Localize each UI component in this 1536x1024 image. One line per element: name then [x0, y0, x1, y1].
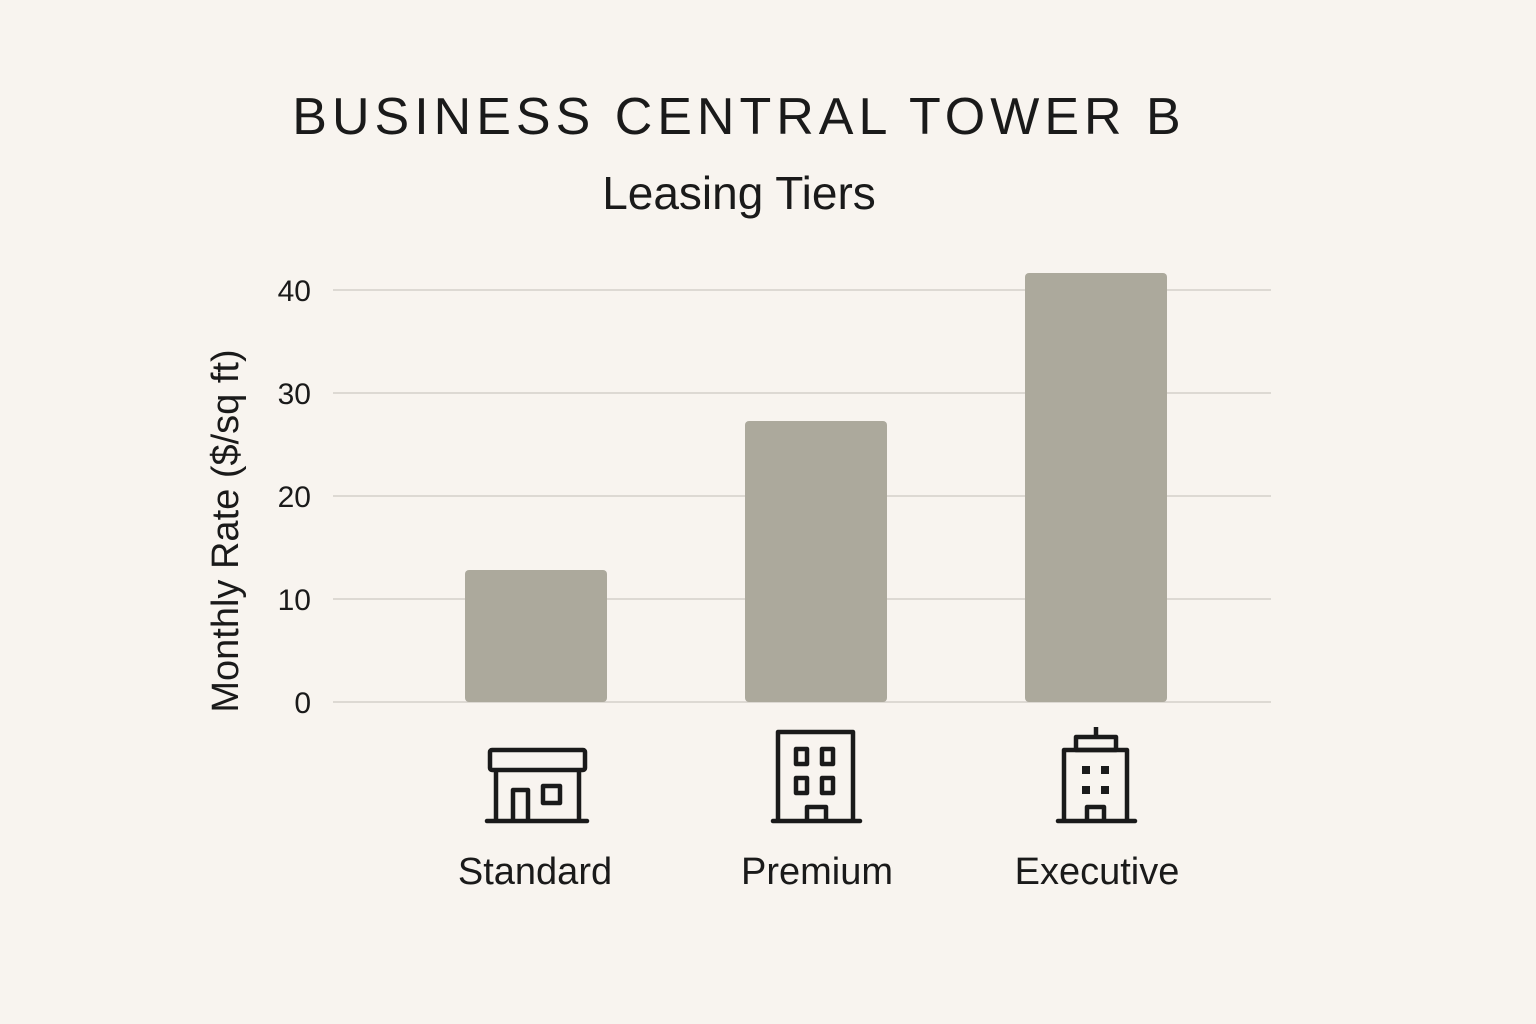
category labels: [458, 851, 1179, 893]
y-axis ticks: 20: [278, 481, 311, 514]
bars: [465, 273, 1167, 702]
category labels: Executive: [1015, 851, 1179, 893]
icon: standard storefront: [487, 750, 587, 821]
category labels: Standard: [458, 851, 612, 893]
y-axis ticks: 30: [278, 378, 311, 411]
y-axis ticks: [278, 275, 311, 720]
y-axis ticks: 40: [278, 275, 311, 308]
subtitle: Leasing Tiers: [602, 167, 876, 219]
title: BUSINESS CENTRAL TOWER B: [292, 88, 1186, 146]
y-axis label: Monthly Rate ($/sq ft): [205, 349, 247, 713]
category labels: Premium: [741, 851, 893, 893]
icon: premium building: [773, 732, 860, 821]
y-axis ticks: 0: [294, 687, 311, 720]
y-axis ticks: 10: [278, 584, 311, 617]
icon: executive tower: [1058, 727, 1135, 821]
